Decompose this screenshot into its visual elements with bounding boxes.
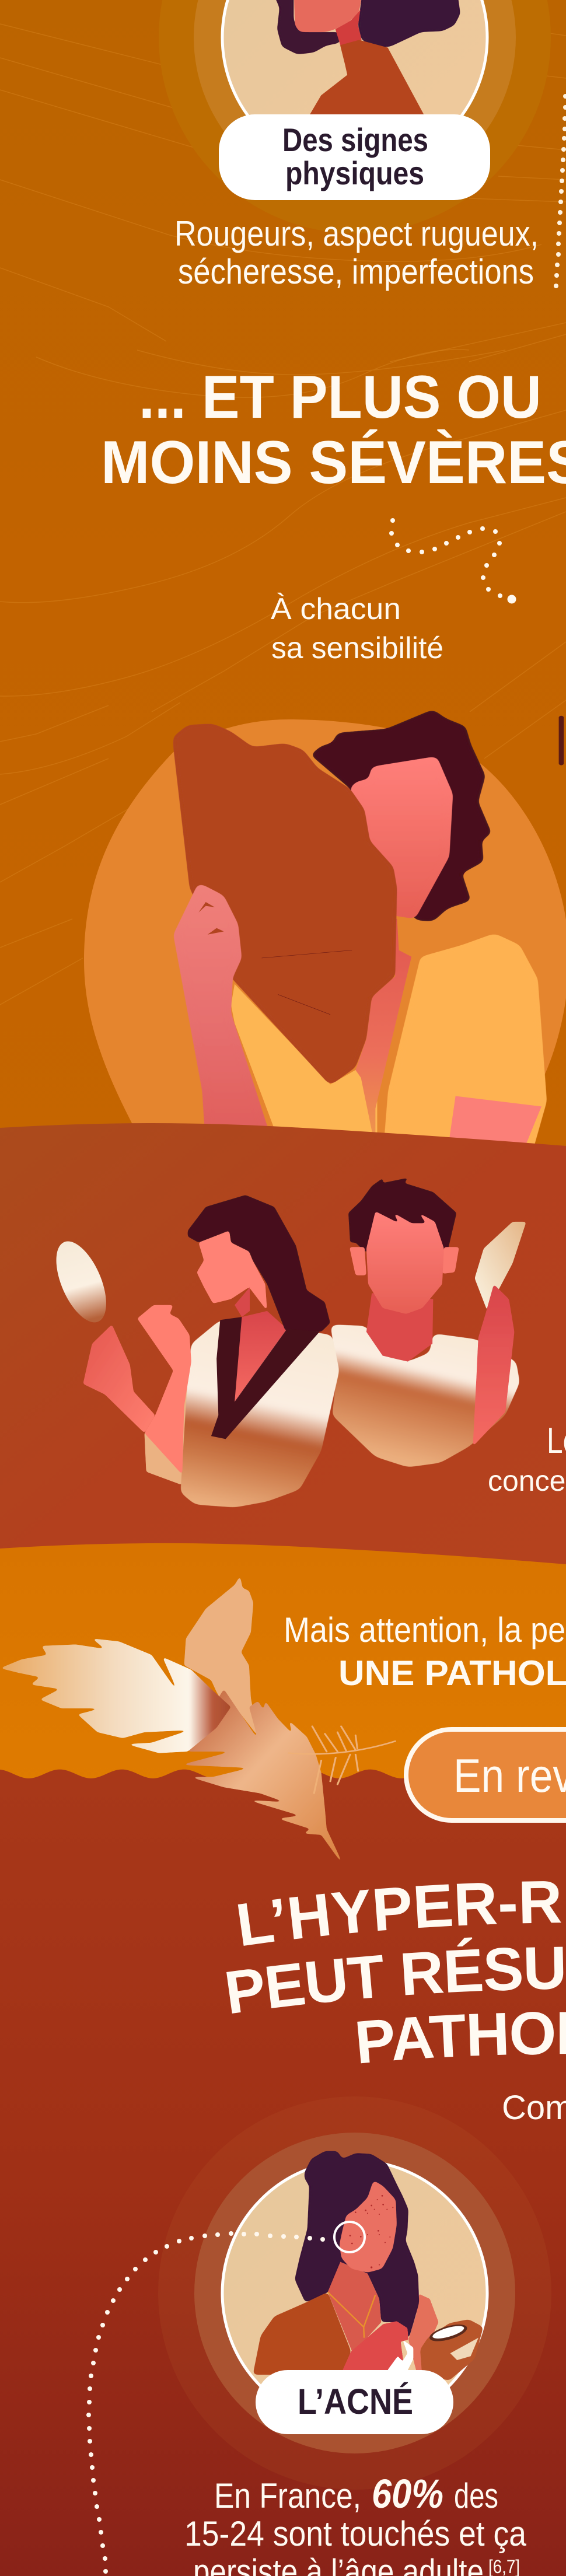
halo rings bbox=[159, 0, 551, 233]
figure bbox=[253, 2151, 483, 2381]
description text: physical signs bbox=[174, 214, 539, 291]
mirror bbox=[46, 1236, 116, 1327]
halo rings bbox=[158, 2096, 551, 2490]
panel: physical signs portrait bbox=[159, 0, 551, 233]
text: à chacun sa sensibilité bbox=[271, 592, 443, 665]
illustration: feathers bbox=[0, 1576, 395, 1868]
magnifier ring bbox=[334, 2222, 365, 2252]
portrait circle bbox=[222, 0, 487, 170]
text: à chacun sa sensibilité: À chacun bbox=[271, 592, 401, 626]
text: acne statistics: 60% bbox=[372, 2471, 443, 2516]
text: à chacun sa sensibilité: sa sensibilité bbox=[271, 631, 443, 665]
feather: downy tip bbox=[289, 1726, 395, 1793]
illustration: woman with mirror and man with feather bbox=[46, 1177, 526, 1508]
panel: brown band with couple bbox=[0, 1123, 566, 1575]
label pill bbox=[219, 114, 490, 200]
feather: left bbox=[0, 1638, 231, 1753]
text: acne statistics bbox=[184, 2471, 527, 2576]
pill label text bbox=[282, 121, 428, 191]
backdrop circle bbox=[84, 719, 566, 1149]
dotted line from acne spot bbox=[86, 2231, 325, 2574]
heading: et plus ou moins sévères: ... ET PLUS OU bbox=[139, 363, 541, 431]
panel: acne portrait bbox=[158, 2096, 551, 2490]
heading: l'hyper-réactivité peut résulter d'une pathologie bbox=[226, 1881, 566, 2063]
decorative fine curved lines bbox=[0, 24, 566, 1005]
dotted curved arrow bbox=[389, 518, 516, 603]
panel: orange section bbox=[0, 1543, 566, 1785]
portrait figure bbox=[271, 0, 460, 115]
background: upper orange section bbox=[0, 0, 566, 1167]
panel: dark red section with wave edge bbox=[0, 1770, 566, 2576]
woman bbox=[83, 1195, 339, 1508]
pill label text: L’ACNÉ bbox=[298, 2382, 413, 2421]
pill label text: Des signes bbox=[282, 121, 428, 158]
heading: et plus ou moins sévères bbox=[101, 363, 566, 497]
text: acne statistics: des bbox=[454, 2476, 498, 2515]
pill label text: physiques bbox=[285, 155, 424, 191]
feather: lower bbox=[180, 1689, 345, 1868]
illustration: person hiding behind a fan bbox=[84, 709, 566, 1159]
text: acne statistics: 15-24 sont touchés et ça bbox=[184, 2514, 527, 2553]
label pill bbox=[256, 2370, 453, 2434]
feather: upper bbox=[184, 1576, 258, 1737]
text: acne statistics: En France, bbox=[214, 2476, 361, 2515]
figure with fan bbox=[173, 709, 564, 1159]
acne spots bbox=[350, 2195, 393, 2269]
dotted connector right bbox=[554, 94, 566, 288]
portrait circle bbox=[222, 2161, 487, 2425]
button: en revanche bbox=[406, 1729, 566, 1820]
text: le ressenti concerne bbox=[488, 1420, 566, 1497]
man bbox=[330, 1177, 526, 1467]
